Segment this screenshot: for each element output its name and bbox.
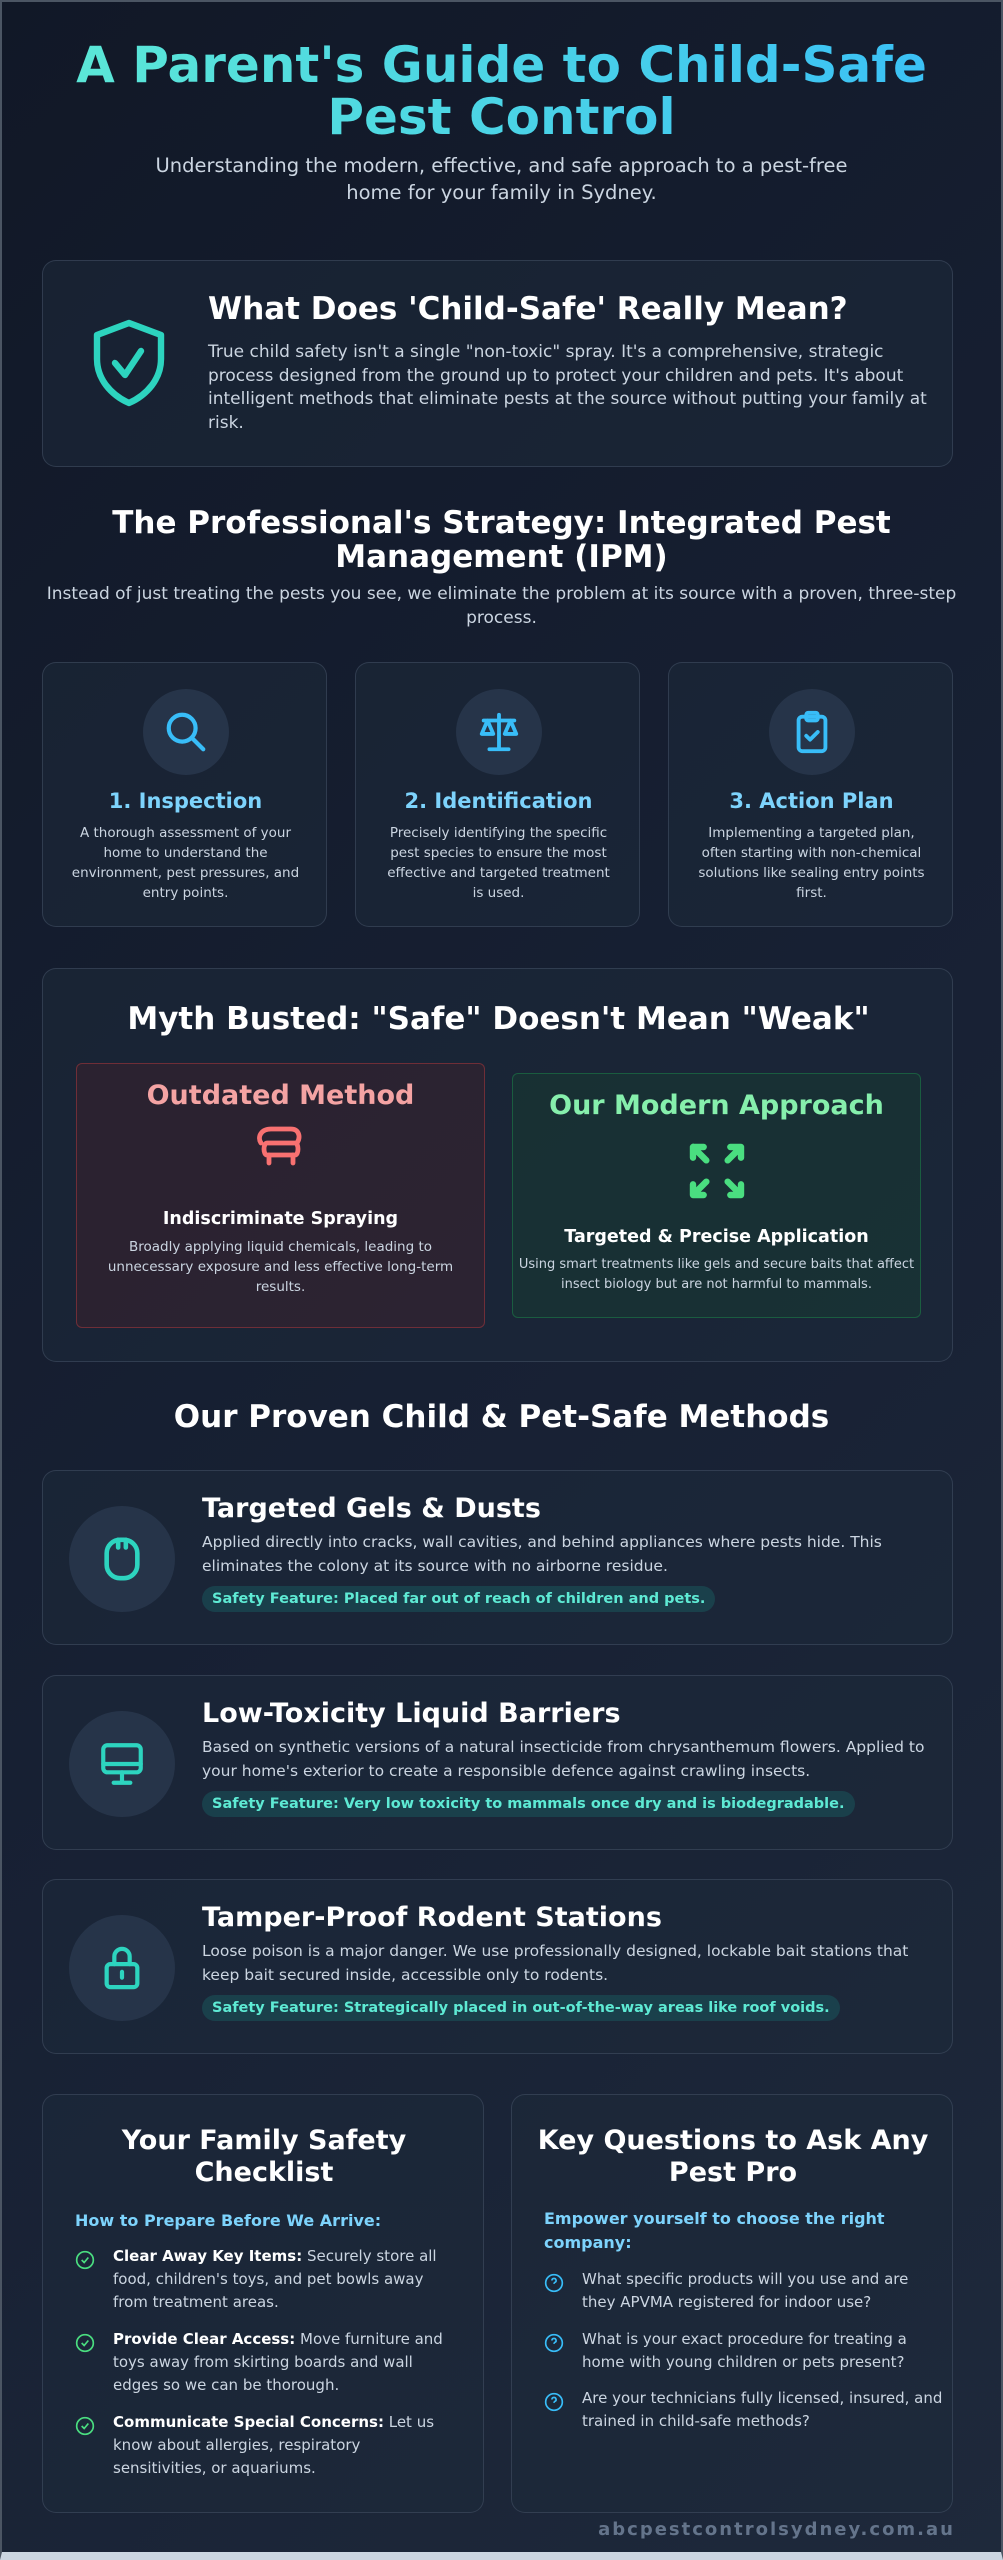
box: outdated method: [76, 1063, 485, 1328]
card: liquid barriers: Low-Toxicity Liquid Barriers: [202, 1698, 621, 1729]
card: rodent stations: [42, 1879, 953, 2054]
title: Pest Control: [327, 88, 676, 146]
card: rodent stations: Tamper-Proof Rodent Stations: [202, 1902, 662, 1933]
panel: checklist: How to Prepare Before We Arrive:: [75, 2211, 381, 2230]
question 1: What specific products will you use and are they APVMA registered for indoor use?: [582, 2270, 908, 2311]
panel: checklist: [42, 2094, 484, 2513]
box: modern approach: Using smart treatments like gels and secure baits that affect insect biology but are not harmful to mammals.: [519, 1257, 914, 1292]
card: liquid barriers: Based on synthetic versions of a natural insecticide from chrysanthemum flowers. Applied to your home's exterior to create a responsible defence against crawling insects.: [202, 1738, 924, 1780]
card: gels: [42, 1470, 953, 1645]
panel: key questions: Empower yourself to choose the right company:: [544, 2209, 885, 2252]
card: inspection: [42, 662, 327, 927]
box: outdated method: Outdated Method: [147, 1080, 414, 1111]
icon: shield check: [94, 320, 164, 406]
card: inspection: 1. Inspection: [109, 789, 262, 813]
panel: checklist: Your Family Safety: [122, 2125, 406, 2156]
card: identification: [355, 662, 640, 927]
box: modern approach: Targeted & Precise Application: [564, 1227, 869, 1247]
box: modern approach: [512, 1073, 921, 1318]
icon: lock: [69, 1915, 175, 2021]
card: gels: Targeted Gels & Dusts: [202, 1493, 541, 1524]
panel: myth busted: [42, 968, 953, 1362]
question 2: What is your exact procedure for treating a home with young children or pets present?: [582, 2330, 907, 2371]
card: identification: Precisely identifying the specific pest species to ensure the most effective and targeted treatment is used.: [387, 825, 610, 901]
box: modern approach: Our Modern Approach: [549, 1090, 884, 1121]
card: liquid barriers: [42, 1675, 953, 1850]
card: liquid barriers: Safety Feature: Very low toxicity to mammals once dry and is biodegradable.: [212, 1796, 844, 1812]
card: gels: Applied directly into cracks, wall cavities, and behind appliances where pests hide. This eliminates the colony at its source with no airborne residue.: [202, 1533, 882, 1575]
panel: what does child-safe mean: [42, 260, 953, 467]
footer: website: abcpestcontrolsydney.com.au: [598, 2519, 955, 2540]
icon: gel: [69, 1506, 175, 1612]
card: rodent stations: Loose poison is a major danger. We use professionally designed, lockable bait stations that keep bait secured inside, accessible only to rodents.: [202, 1942, 908, 1984]
panel: key questions: Key Questions to Ask Any: [538, 2125, 928, 2156]
IPM subtitle: Instead of just treating the pests you see, we eliminate the problem at its source with a proven, three-step process.: [47, 584, 956, 628]
body text: True child safety isn't a single "non-toxic" spray. It's a comprehensive, strategic process designed from the ground up to protect your children and pets. It's about intelligent methods that eliminate pests at the source without putting your family at risk.: [208, 342, 927, 432]
card: identification: 2. Identification: [404, 789, 592, 813]
checklist item 2: Provide Clear Access: Move furniture and toys away from skirting boards and wall edges so we can be thorough.: [113, 2330, 443, 2394]
heading: methods: Our Proven Child & Pet-Safe Methods: [174, 1399, 829, 1435]
icon: clipboard: [769, 689, 855, 775]
panel: key questions: Pest Pro: [669, 2157, 797, 2188]
card: gels: Safety Feature: Placed far out of reach of children and pets.: [212, 1591, 705, 1607]
heading: IPM: The Professional's Strategy: Integrated Pest Management (IPM): [112, 505, 891, 575]
icon: arrows: [690, 1144, 744, 1198]
question 3: Are your technicians fully licensed, insured, and trained in child-safe methods?: [582, 2389, 942, 2430]
heading: What Does 'Child-Safe' Really Mean?: [208, 291, 848, 327]
title: A Parent's Guide to Child-Safe: [76, 36, 927, 94]
box: outdated method: Broadly applying liquid chemicals, leading to unnecessary exposure and less effective long-term results.: [108, 1239, 453, 1295]
icon: magnifier: [143, 689, 229, 775]
icon: scales: [456, 689, 542, 775]
card: action plan: 3. Action Plan: [729, 789, 894, 813]
icon: monitor: [69, 1711, 175, 1817]
card: inspection: A thorough assessment of your home to understand the environment, pest pressures, and entry points.: [72, 825, 299, 901]
checklist item 1: Clear Away Key Items: Securely store all food, children's toys, and pet bowls away from treatment areas.: [113, 2247, 437, 2311]
panel: checklist: Checklist: [195, 2157, 333, 2188]
card: rodent stations: Safety Feature: Strategically placed in out-of-the-way areas like roof voids.: [212, 2000, 830, 2016]
panel: key questions: [511, 2094, 953, 2513]
icon: spray: [257, 1126, 302, 1166]
card: action plan: [668, 662, 953, 927]
box: outdated method: Indiscriminate Spraying: [163, 1209, 398, 1229]
subtitle: Understanding the modern, effective, and safe approach to a pest-free home for your family in Sydney.: [155, 154, 848, 204]
heading: Myth Busted: "Safe" Doesn't Mean "Weak": [127, 1001, 870, 1037]
checklist item 3: Communicate Special Concerns: Let us know about allergies, respiratory sensitivities, or aquariums.: [113, 2413, 434, 2477]
card: action plan: Implementing a targeted plan, often starting with non-chemical solutions like sealing entry points first.: [698, 825, 925, 901]
title: [76, 36, 927, 146]
